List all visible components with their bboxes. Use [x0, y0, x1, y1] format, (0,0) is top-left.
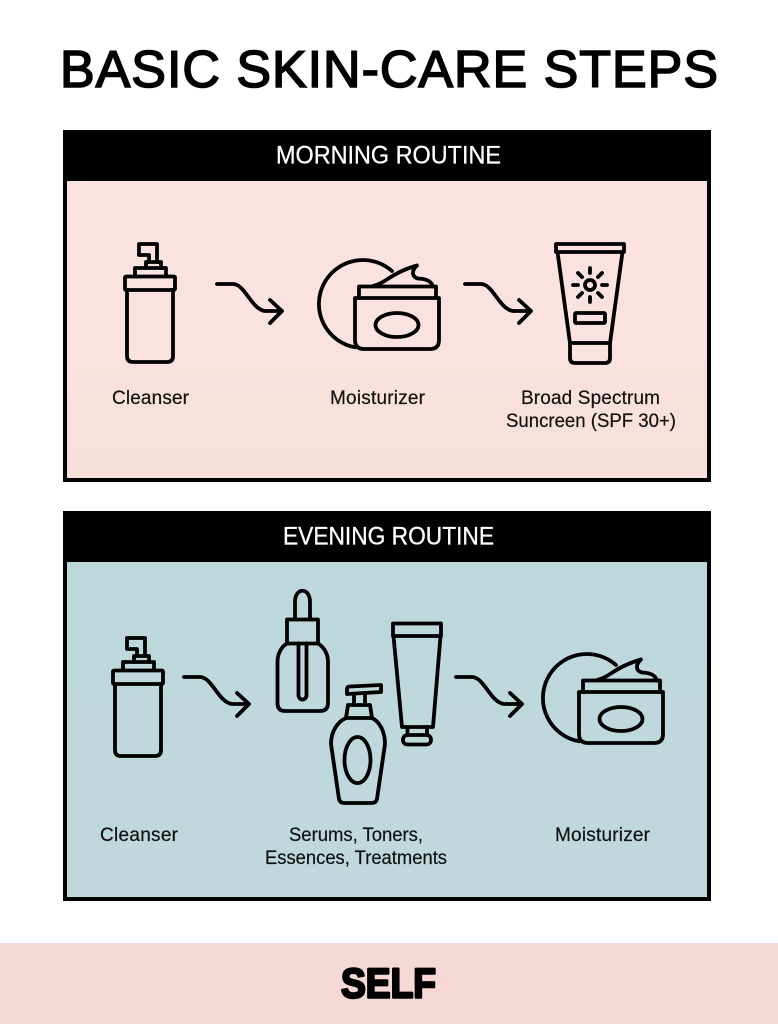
morning header bar	[63, 130, 711, 181]
label: broad spectrum sunscreen	[506, 388, 676, 432]
label: serums, toners, essences, treatments: Serums, Toners,	[289, 825, 423, 846]
panel: morning routine	[63, 130, 711, 480]
icon: moisturizer jar	[543, 654, 663, 743]
label: broad spectrum sunscreen: Broad Spectrum	[521, 388, 660, 409]
label: serums, toners, essences, treatments: Essences, Treatments	[265, 848, 447, 869]
arrow: cleanser to moisturizer	[217, 284, 282, 323]
label: cleanser: Cleanser	[100, 825, 179, 846]
icon: sunscreen tube	[556, 244, 624, 363]
label: serums, toners, essences, treatments	[265, 825, 447, 869]
evening header bar	[63, 511, 711, 562]
arrow: moisturizer to sunscreen	[465, 284, 531, 323]
icon: cleanser bottle	[125, 244, 175, 362]
icon: dropper bottle	[278, 591, 328, 711]
label: broad spectrum sunscreen: Suncreen (SPF 30+)	[506, 411, 676, 432]
logo: SELF: SELF	[341, 960, 436, 1006]
label: cleanser: Cleanser	[112, 388, 190, 409]
panel: evening routine	[63, 511, 711, 899]
icon: pump bottle	[331, 685, 385, 803]
label: moisturizer: Moisturizer	[330, 388, 426, 409]
arrow: serums to moisturizer	[456, 677, 522, 716]
evening heading: EVENING ROUTINE	[283, 522, 494, 550]
morning heading: MORNING ROUTINE	[276, 142, 501, 170]
icon: cleanser bottle	[113, 638, 163, 756]
icon: moisturizer jar	[319, 260, 439, 349]
label: moisturizer: Moisturizer	[555, 825, 651, 846]
footer band	[0, 943, 778, 1024]
title: BASIC SKIN-CARE STEPS	[60, 41, 718, 99]
icon: squeeze tube	[393, 624, 441, 744]
arrow: cleanser to serums	[184, 677, 249, 716]
